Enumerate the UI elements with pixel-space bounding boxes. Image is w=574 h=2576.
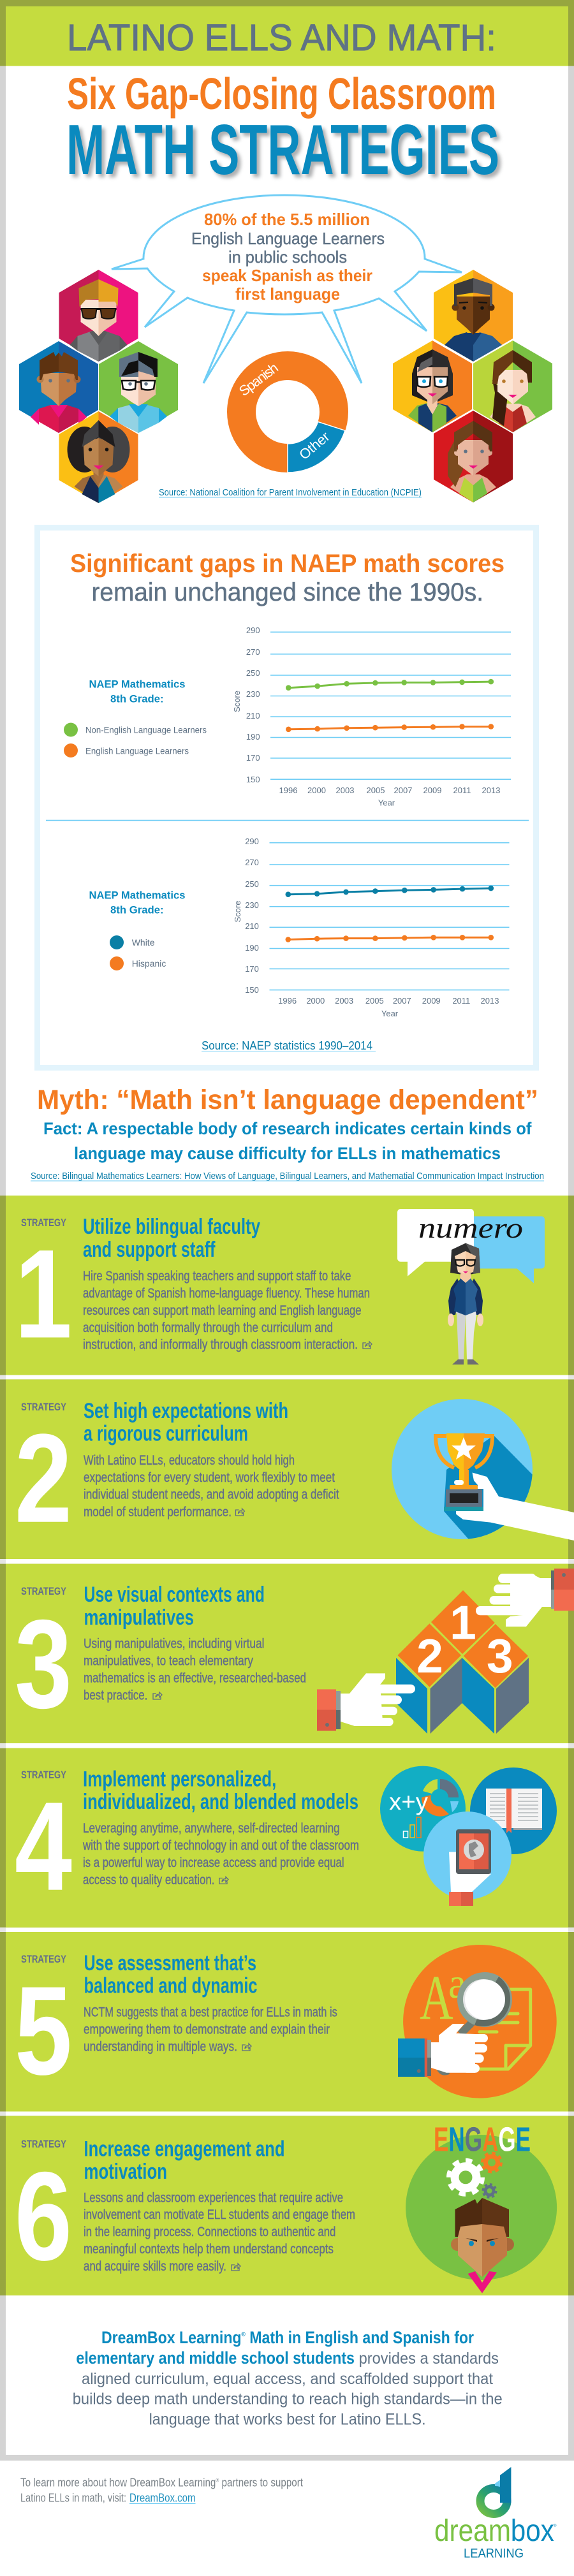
legend: ELL chart: NAEP Mathematics bbox=[89, 678, 185, 691]
fact text bbox=[43, 1119, 532, 1163]
strategy 4 panel bbox=[0, 1748, 574, 1928]
word: ENGAGE: ENGAGE bbox=[434, 2121, 531, 2159]
closing statement: provides a standards bbox=[359, 2350, 499, 2367]
line chart: NAEP scores, ELL vs non-ELL: 2007 bbox=[394, 786, 412, 795]
closing statement: Math in English and Spanish for bbox=[246, 2328, 474, 2347]
panel heading: Significant gaps in NAEP math scores bbox=[70, 550, 504, 578]
line chart: NAEP scores, ELL vs non-ELL: 2013 bbox=[482, 786, 500, 795]
strategy 1 body: Hire Spanish speaking teachers and support staff to take bbox=[83, 1269, 351, 1284]
strategy 1 body: acquisition both formally through the curriculum and bbox=[83, 1321, 333, 1335]
strategy 3 body: best practice. bbox=[84, 1688, 147, 1703]
footer call to action: Latino ELLs in math, visit: bbox=[20, 2492, 126, 2505]
strategy label: STRATEGY bbox=[21, 1217, 66, 1229]
strategy 5 panel bbox=[0, 1932, 574, 2112]
closing statement: aligned curriculum, equal access, and scaffolded support that bbox=[82, 2370, 493, 2388]
number 4: 4 bbox=[15, 1776, 72, 1917]
speech bubble bbox=[112, 195, 462, 383]
strategy 3 panel bbox=[0, 1564, 574, 1743]
donut label: Spanish: Spanish bbox=[236, 360, 281, 399]
line chart: NAEP scores, ELL vs non-ELL: 230 bbox=[246, 689, 260, 699]
line chart: NAEP scores, ELL vs non-ELL bbox=[232, 626, 511, 808]
speech bubble: white bbox=[397, 1209, 474, 1277]
strategy 1 body: resources can support math learning and English language bbox=[83, 1303, 362, 1318]
bubble text: speak Spanish as their bbox=[202, 266, 372, 285]
block 1 bbox=[431, 1590, 495, 1654]
student portrait bbox=[451, 2198, 514, 2293]
strategy 3 title bbox=[84, 1583, 265, 1630]
strategy 3 body: mathematics is an effective, researched-based bbox=[84, 1671, 306, 1686]
line chart: NAEP scores, ELL vs non-ELL: 190 bbox=[246, 732, 260, 742]
icon: magnifying glass over document: A bbox=[420, 1962, 453, 2033]
strategy 5 title bbox=[84, 1951, 258, 1998]
legend: race chart bbox=[89, 889, 185, 970]
footer call to action: ® bbox=[216, 2478, 219, 2483]
closing statement: builds deep math understanding to reach high standards—in the bbox=[73, 2390, 503, 2408]
line chart: NAEP scores, ELL vs non-ELL: Score bbox=[232, 691, 242, 712]
strategy 1 title: and support staff bbox=[83, 1238, 216, 1262]
strategy 2 body: individual student needs, and avoid adopting a deficit bbox=[84, 1488, 339, 1502]
strategy 6 title: motivation bbox=[84, 2160, 167, 2184]
hand bbox=[456, 1473, 574, 1540]
strategy label: STRATEGY bbox=[21, 1769, 66, 1781]
legend: race chart: White bbox=[132, 937, 155, 948]
line chart: NAEP scores, White vs Hispanic: 2013 bbox=[481, 996, 499, 1006]
circle: math and data: x+y bbox=[389, 1789, 428, 1816]
bubble text: first language bbox=[235, 284, 340, 304]
strategy 6 body: involvement can motivate ELL students and engage them bbox=[84, 2207, 355, 2222]
strategy 3 title: Use visual contexts and bbox=[84, 1583, 265, 1607]
line chart: NAEP scores, White vs Hispanic: 250 bbox=[245, 879, 259, 889]
icon: blended learning circles bbox=[380, 1766, 557, 1906]
legend: ELL chart: 8th Grade: bbox=[110, 693, 164, 705]
strategy 6 title: Increase engagement and bbox=[84, 2137, 284, 2161]
strategy label: STRATEGY bbox=[21, 1586, 66, 1597]
legend: race chart: 8th Grade: bbox=[110, 904, 164, 916]
number 1: 1 bbox=[15, 1223, 72, 1365]
block 3 bbox=[464, 1624, 528, 1688]
strategy 4 body: with the support of technology in and out of the classroom bbox=[82, 1838, 359, 1853]
student: man with blue shirt bbox=[434, 270, 513, 362]
strategy 5 title: Use assessment that’s bbox=[84, 1951, 256, 1975]
strategy 3 body: Using manipulatives, including virtual bbox=[84, 1637, 264, 1651]
source: NCPIE: Source: National Coalition for Parent Involvement in Education (NCPIE) bbox=[159, 487, 422, 498]
line chart: NAEP scores, White vs Hispanic: 210 bbox=[245, 921, 259, 931]
student: boy with pink shirt bbox=[19, 341, 98, 433]
strategy 2 panel bbox=[0, 1379, 574, 1559]
strategy 6 body: and acquire skills more easily. bbox=[84, 2259, 226, 2274]
myth and fact bbox=[31, 1085, 544, 1182]
line chart: NAEP scores, White vs Hispanic: 2011 bbox=[452, 996, 470, 1006]
legend: ELL chart bbox=[64, 678, 207, 757]
donut chart: Spanish 80%, Other 20% bbox=[236, 360, 345, 472]
block 1: 1 bbox=[450, 1596, 476, 1650]
closing statement: ® bbox=[242, 2331, 246, 2338]
block 3: 3 bbox=[487, 1629, 513, 1683]
bubble text: 80% of the 5.5 million bbox=[204, 210, 370, 229]
line chart: NAEP scores, White vs Hispanic: Year bbox=[381, 1009, 399, 1018]
footer call to action bbox=[20, 2477, 303, 2505]
strategy 4 title: Implement personalized, bbox=[83, 1767, 276, 1791]
student: woman with glasses bbox=[393, 340, 472, 432]
line chart: NAEP scores, White vs Hispanic: 1996 bbox=[278, 996, 297, 1006]
icon: trophy in hand bbox=[392, 1399, 574, 1543]
strategy 2 body: With Latino ELLs, educators should hold high bbox=[84, 1453, 295, 1468]
line chart: NAEP scores, ELL vs non-ELL: 2005 bbox=[367, 786, 385, 795]
donut label: Other: Other bbox=[296, 428, 333, 463]
strategy 4 title: individualized, and blended models bbox=[83, 1790, 358, 1814]
strategy 6 body: meaningful contexts help them understand concepts bbox=[84, 2242, 334, 2257]
strategy 3 body bbox=[84, 1637, 306, 1703]
panel heading bbox=[70, 550, 504, 606]
DreamBox Learning logo: LEARNING bbox=[464, 2547, 524, 2561]
header banner bbox=[0, 0, 574, 66]
strategy 6 body bbox=[84, 2191, 355, 2274]
strategy 4 body bbox=[82, 1821, 359, 1887]
line chart: NAEP scores, White vs Hispanic: 190 bbox=[245, 943, 259, 953]
myth heading: Myth: “Math isn’t language dependent” bbox=[37, 1085, 538, 1115]
strategy 5 body bbox=[84, 2005, 337, 2054]
student: girl with curly hair bbox=[59, 411, 138, 503]
strategy 2 body: model of student performance. bbox=[84, 1505, 232, 1519]
strategy 4 body: is a powerful way to increase access and provide equal bbox=[83, 1855, 344, 1870]
strategy 1 body: instruction, and informally through classroom interaction. bbox=[83, 1338, 358, 1352]
strategy label: STRATEGY bbox=[21, 1401, 66, 1413]
strategy 6 title bbox=[84, 2137, 284, 2184]
speech bubble: blue bbox=[474, 1217, 545, 1283]
footer call to action: DreamBox.com bbox=[129, 2492, 195, 2505]
strategy 1 panel bbox=[0, 1196, 574, 1375]
main title bbox=[66, 69, 503, 193]
line chart: NAEP scores, White vs Hispanic: 2003 bbox=[335, 996, 353, 1006]
strategy 1 body bbox=[83, 1269, 372, 1352]
strategy 4 body: access to quality education. bbox=[83, 1873, 214, 1887]
line chart: NAEP scores, ELL vs non-ELL: 290 bbox=[246, 626, 260, 635]
closing statement: DreamBox Learning bbox=[101, 2328, 265, 2347]
student: boy with glasses bbox=[99, 341, 178, 433]
line chart: NAEP scores, ELL vs non-ELL: 170 bbox=[246, 753, 260, 763]
student: woman with brown hair bbox=[434, 411, 513, 502]
panel heading: remain unchanged since the 1990s. bbox=[92, 578, 483, 606]
right group of student portraits bbox=[393, 270, 552, 502]
line chart: NAEP scores, ELL vs non-ELL: 270 bbox=[246, 647, 260, 657]
line chart: NAEP scores, White vs Hispanic: 270 bbox=[245, 858, 259, 867]
line chart: NAEP scores, ELL vs non-ELL: 1996 bbox=[279, 786, 297, 795]
line chart: NAEP scores, ELL vs non-ELL: 2003 bbox=[336, 786, 354, 795]
bubble text: in public schools bbox=[228, 247, 347, 267]
strategy 1 title bbox=[83, 1215, 260, 1262]
number 5: 5 bbox=[15, 1960, 72, 2101]
strategy 1 title: Utilize bilingual faculty bbox=[83, 1215, 260, 1239]
left group of student portraits bbox=[19, 270, 178, 503]
legend: ELL chart: Non-English Language Learners bbox=[85, 724, 207, 735]
series: White bbox=[286, 886, 494, 897]
strategy 4 body: Leveraging anytime, anywhere, self-directed learning bbox=[83, 1821, 340, 1836]
number 3: 3 bbox=[15, 1593, 72, 1734]
block 2: 2 bbox=[416, 1629, 443, 1683]
line chart: NAEP scores, ELL vs non-ELL: 250 bbox=[246, 668, 260, 678]
legend: race chart: NAEP Mathematics bbox=[89, 889, 185, 902]
line chart: NAEP scores, ELL vs non-ELL: 210 bbox=[246, 711, 260, 721]
legend: ELL chart: English Language Learners bbox=[85, 746, 189, 756]
panel: NAEP gaps bbox=[37, 528, 536, 1067]
strategy 2 title: a rigorous curriculum bbox=[84, 1422, 248, 1446]
strategy 5 body: empowering them to demonstrate and explain their bbox=[84, 2023, 330, 2037]
icon: teacher with speech bubbles bbox=[397, 1209, 545, 1365]
icon: magnifying glass over document: a bbox=[448, 1959, 466, 2007]
line chart: NAEP scores, White vs Hispanic: 2005 bbox=[365, 996, 384, 1006]
student: blond with sunglasses bbox=[59, 270, 138, 362]
strategy 2 body: expectations for every student, work flexibly to meet bbox=[84, 1470, 335, 1485]
circle: math and data bbox=[380, 1766, 466, 1852]
circle: open book bbox=[470, 1767, 557, 1854]
line chart: NAEP scores, White vs Hispanic: 2007 bbox=[393, 996, 411, 1006]
bubble text bbox=[191, 210, 385, 304]
closing statement bbox=[73, 2328, 503, 2428]
gears bbox=[449, 2153, 501, 2197]
closing statement: elementary and middle school students bbox=[76, 2348, 355, 2367]
line chart: NAEP scores, White vs Hispanic: 170 bbox=[245, 964, 259, 974]
closing statement: language that works best for Latino ELLS. bbox=[149, 2410, 426, 2428]
strategy 1 body: advantage of Spanish home-language fluency. These human bbox=[83, 1286, 370, 1301]
series: Hispanic bbox=[286, 935, 494, 942]
strategy label: STRATEGY bbox=[21, 1954, 66, 1965]
series: non-ELL bbox=[286, 679, 494, 691]
trophy bbox=[436, 1433, 492, 1511]
magnifying glass bbox=[438, 1972, 512, 2074]
strategy 5 title: balanced and dynamic bbox=[84, 1973, 258, 1998]
series: ELL bbox=[286, 724, 494, 732]
DreamBox Learning logo: ® bbox=[554, 2524, 557, 2528]
block 2 bbox=[397, 1623, 461, 1687]
line chart: NAEP scores, ELL vs non-ELL: 2009 bbox=[423, 786, 441, 795]
strategy 4 title bbox=[83, 1767, 358, 1814]
strategy 5 body: understanding in multiple ways. bbox=[84, 2040, 237, 2054]
strategy 6 body: in the learning process. Connections to authentic and bbox=[84, 2225, 335, 2239]
fact text: language may cause difficulty for ELLs in mathematics bbox=[74, 1144, 501, 1163]
number 6: 6 bbox=[15, 2146, 72, 2287]
strategy 2 body bbox=[84, 1453, 339, 1519]
strategy label: STRATEGY bbox=[21, 2139, 66, 2150]
source: NAEP: Source: NAEP statistics 1990–2014 bbox=[202, 1039, 372, 1052]
line chart: NAEP scores, White vs Hispanic bbox=[233, 837, 509, 1018]
word: numero: numero bbox=[418, 1211, 523, 1244]
DreamBox Learning logo bbox=[434, 2467, 557, 2561]
strategy 6 body: Lessons and classroom experiences that require active bbox=[84, 2191, 343, 2205]
lower-left pointing hand bbox=[317, 1673, 415, 1731]
circle: tablet in hand bbox=[423, 1811, 511, 1906]
line chart: NAEP scores, White vs Hispanic: 2009 bbox=[422, 996, 441, 1006]
legend: race chart: Hispanic bbox=[132, 958, 166, 969]
footer call to action: partners to support bbox=[219, 2477, 303, 2489]
bubble text: English Language Learners bbox=[191, 229, 385, 248]
line chart: NAEP scores, ELL vs non-ELL: Year bbox=[378, 798, 395, 808]
footer call to action: To learn more about how DreamBox Learning bbox=[20, 2477, 252, 2489]
logo mark bbox=[480, 2467, 511, 2514]
strategy 2 title: Set high expectations with bbox=[84, 1399, 288, 1423]
upper-right pointing hand bbox=[476, 1569, 574, 1627]
icon: numbered fold-out blocks with pointing hands bbox=[317, 1569, 574, 1734]
number 2: 2 bbox=[15, 1408, 72, 1549]
teacher figure bbox=[448, 1243, 483, 1365]
line chart: NAEP scores, ELL vs non-ELL: 2011 bbox=[453, 786, 471, 795]
strategy 2 title bbox=[84, 1399, 288, 1446]
DreamBox Learning logo: box bbox=[511, 2514, 554, 2548]
strategy 3 body: manipulatives, to teach elementary bbox=[84, 1654, 253, 1669]
fact text: Fact: A respectable body of research indicates certain kinds of bbox=[43, 1119, 532, 1138]
line chart: NAEP scores, White vs Hispanic: 150 bbox=[245, 985, 259, 995]
line chart: NAEP scores, White vs Hispanic: 230 bbox=[245, 900, 259, 910]
fold panels bbox=[396, 1658, 529, 1734]
strategy 6 panel bbox=[0, 2116, 574, 2295]
icon: magnifying glass over document bbox=[398, 1945, 557, 2098]
line chart: NAEP scores, ELL vs non-ELL: 150 bbox=[246, 775, 260, 784]
line chart: NAEP scores, White vs Hispanic: 2000 bbox=[306, 996, 325, 1006]
line chart: NAEP scores, ELL vs non-ELL: 2000 bbox=[307, 786, 326, 795]
line chart: NAEP scores, White vs Hispanic: Score bbox=[233, 901, 242, 922]
icon: student with gears and ENGAGE bbox=[406, 2121, 557, 2293]
document bbox=[478, 1989, 531, 2069]
strategy 5 body: NCTM suggests that a best practice for ELLs in math is bbox=[84, 2005, 337, 2020]
banner title: LATINO ELLS AND MATH: bbox=[67, 17, 496, 59]
strategy 3 title: manipulatives bbox=[84, 1606, 194, 1630]
line chart: NAEP scores, White vs Hispanic: 290 bbox=[245, 837, 259, 846]
hand holding glass bbox=[398, 2024, 488, 2077]
student: woman with ponytail bbox=[473, 340, 552, 432]
logo wordmark: dream bbox=[434, 2514, 511, 2548]
